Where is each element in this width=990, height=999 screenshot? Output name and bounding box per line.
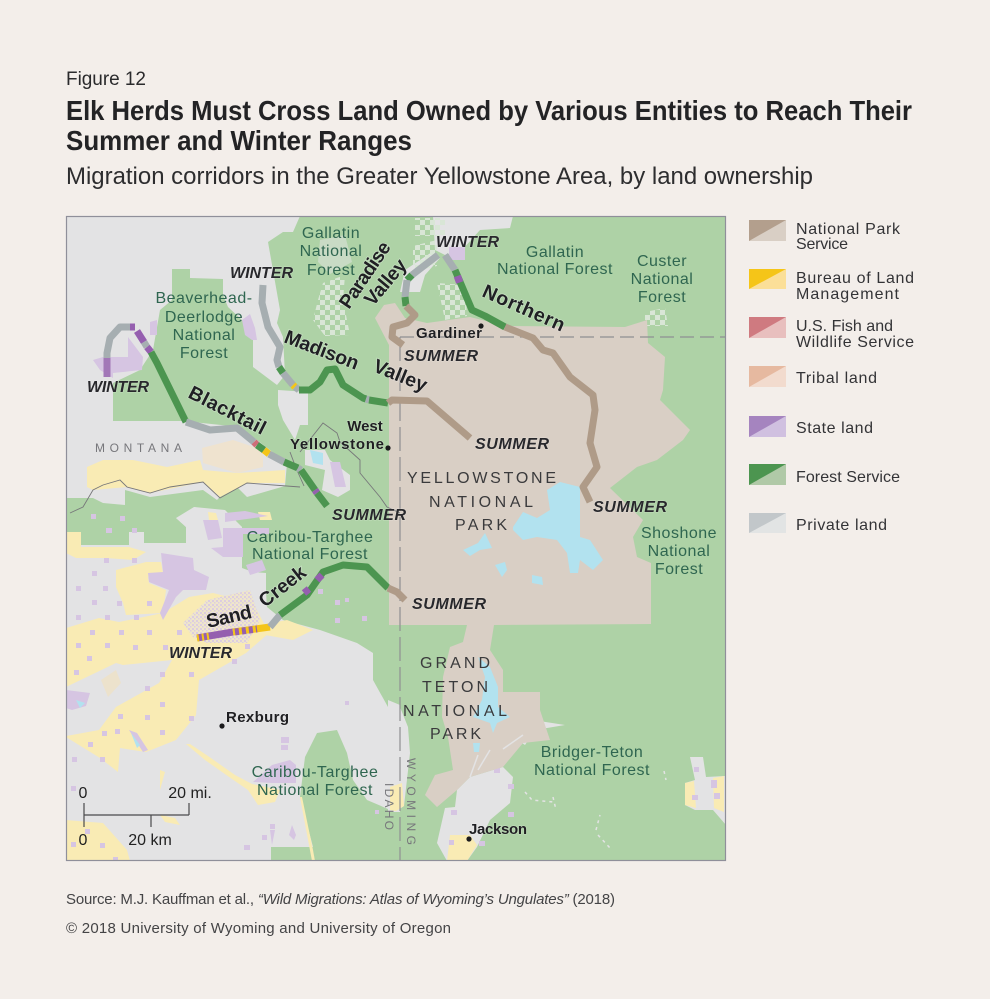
park labels: GRAND	[420, 655, 490, 672]
legend: private land: Private land	[796, 517, 887, 534]
land: national park service	[375, 303, 690, 807]
land: grey speckles in Teton valley	[470, 735, 666, 848]
forest labels: Beaverhead-	[155, 290, 253, 307]
corridor: Sand Creek	[197, 565, 405, 638]
land: private inholdings	[176, 216, 726, 861]
park labels: TETON	[422, 679, 488, 696]
forest labels: Caribou-Targhee	[252, 764, 378, 781]
legend: national park service	[749, 220, 901, 253]
legend: national park service: National Park	[796, 221, 901, 238]
corridor labels: Paradise	[335, 237, 396, 313]
legend: bureau of land management	[749, 269, 914, 303]
land: tribal	[202, 440, 263, 473]
forest labels: National	[300, 243, 362, 260]
figure label: Figure 12	[66, 69, 146, 90]
state labels: IDAHO	[382, 783, 396, 830]
land: state parcels	[71, 511, 720, 860]
forest labels: Custer	[637, 253, 687, 270]
corridor labels: Creek	[255, 561, 311, 612]
park labels: PARK	[430, 726, 481, 743]
forest labels: Forest	[638, 289, 686, 306]
corridor labels: Valley	[370, 355, 430, 397]
water: lakes	[76, 450, 603, 752]
legend: forest service	[749, 464, 900, 486]
forest labels: Gallatin	[526, 244, 584, 261]
corridor labels: Blacktail	[185, 382, 270, 440]
legend: bureau of land management: Management	[796, 286, 900, 303]
legend: tribal land: Tribal land	[796, 370, 877, 387]
forest labels: Shoshone	[641, 525, 717, 542]
forest labels: National Forest	[497, 261, 613, 278]
forest labels: National	[631, 271, 693, 288]
place labels: Rexburg	[226, 709, 289, 726]
season labels	[87, 234, 667, 662]
corridor labels: Sand	[204, 601, 254, 633]
season labels: WINTER	[436, 234, 499, 251]
forest labels: Caribou-Targhee	[247, 529, 373, 546]
land: speckled parcels near Sand Creek	[183, 590, 260, 643]
forest labels: Deerlodge	[165, 309, 243, 326]
park labels: PARK	[455, 517, 507, 534]
land: bureau of land management	[66, 460, 724, 861]
place labels	[226, 325, 527, 838]
corridor: Northern	[445, 255, 597, 502]
scale bar: 0	[79, 785, 88, 802]
corridor: Madison Valley	[262, 285, 470, 438]
forest labels: National Forest	[257, 782, 373, 799]
legend: state land	[749, 416, 873, 437]
title	[66, 95, 912, 156]
forest labels: National	[648, 543, 710, 560]
forest labels: Forest	[180, 345, 228, 362]
legend: bureau of land management: Bureau of Land	[796, 270, 914, 287]
place labels: Yellowstone	[290, 436, 384, 453]
legend	[749, 220, 914, 534]
corridor labels: Madison	[281, 326, 362, 375]
forest labels	[155, 225, 717, 799]
land: checkerboard ownership	[313, 275, 350, 336]
park labels: NATIONAL	[403, 703, 507, 720]
map frame	[66, 216, 726, 860]
season labels: SUMMER	[593, 499, 667, 516]
state borders	[70, 337, 726, 861]
land: state land	[66, 247, 465, 710]
season labels: WINTER	[87, 379, 149, 396]
forest labels: Gallatin	[302, 225, 360, 242]
park labels: YELLOWSTONE	[407, 470, 556, 487]
title: Elk Herds Must Cross Land Owned by Various Entities to Reach Their	[66, 95, 912, 126]
legend: state land: State land	[796, 420, 873, 437]
place labels: Gardiner	[416, 325, 482, 342]
legend: fish and wildlife: Wildlife Service	[796, 334, 914, 351]
forest labels: National	[173, 327, 235, 344]
title: Summer and Winter Ranges	[66, 125, 412, 156]
season labels: WINTER	[169, 645, 232, 662]
park labels: NATIONAL	[429, 494, 533, 511]
forest labels: Forest	[655, 561, 703, 578]
corridor: Blacktail	[107, 327, 327, 506]
land: forest service	[67, 216, 726, 861]
season labels: SUMMER	[404, 348, 478, 365]
legend: forest service: Forest Service	[796, 469, 900, 486]
state labels: MONTANA	[95, 441, 182, 455]
forest labels: Bridger-Teton	[541, 744, 643, 761]
town dots	[219, 323, 484, 842]
source note: Source: M.J. Kauffman et al., “Wild Migrations: Atlas of Wyoming’s Ungulates” (2018)	[66, 891, 615, 908]
corridor labels: Valley	[360, 255, 412, 310]
scale bar: 20 mi.	[168, 785, 212, 802]
season labels: SUMMER	[332, 507, 406, 524]
place labels: Jackson	[469, 821, 527, 838]
park labels	[403, 470, 556, 743]
state labels: WYOMING	[404, 758, 418, 845]
map	[66, 216, 726, 861]
legend: national park service: Service	[796, 236, 848, 253]
season labels: SUMMER	[475, 436, 549, 453]
scale bar: 20 km	[128, 832, 172, 849]
season labels: WINTER	[230, 265, 293, 282]
legend: private land	[749, 513, 887, 534]
state labels	[95, 441, 418, 845]
forest labels: Forest	[307, 262, 355, 279]
corridor labels: Northern	[479, 280, 568, 336]
legend: tribal land	[749, 366, 877, 387]
legend: fish and wildlife	[749, 317, 914, 351]
subtitle: Migration corridors in the Greater Yellowstone Area, by land ownership	[66, 163, 813, 190]
scale bar: 0	[79, 832, 88, 849]
season labels: SUMMER	[412, 596, 486, 613]
legend: fish and wildlife: U.S. Fish and	[796, 318, 893, 335]
copyright: © 2018 University of Wyoming and University of Oregon	[66, 920, 451, 937]
scale bar	[79, 785, 212, 849]
corridor labels	[185, 237, 568, 633]
corridor: Paradise Valley	[392, 255, 438, 345]
forest labels: National Forest	[534, 762, 650, 779]
forest labels: National Forest	[252, 546, 368, 563]
place labels: West	[347, 418, 383, 435]
